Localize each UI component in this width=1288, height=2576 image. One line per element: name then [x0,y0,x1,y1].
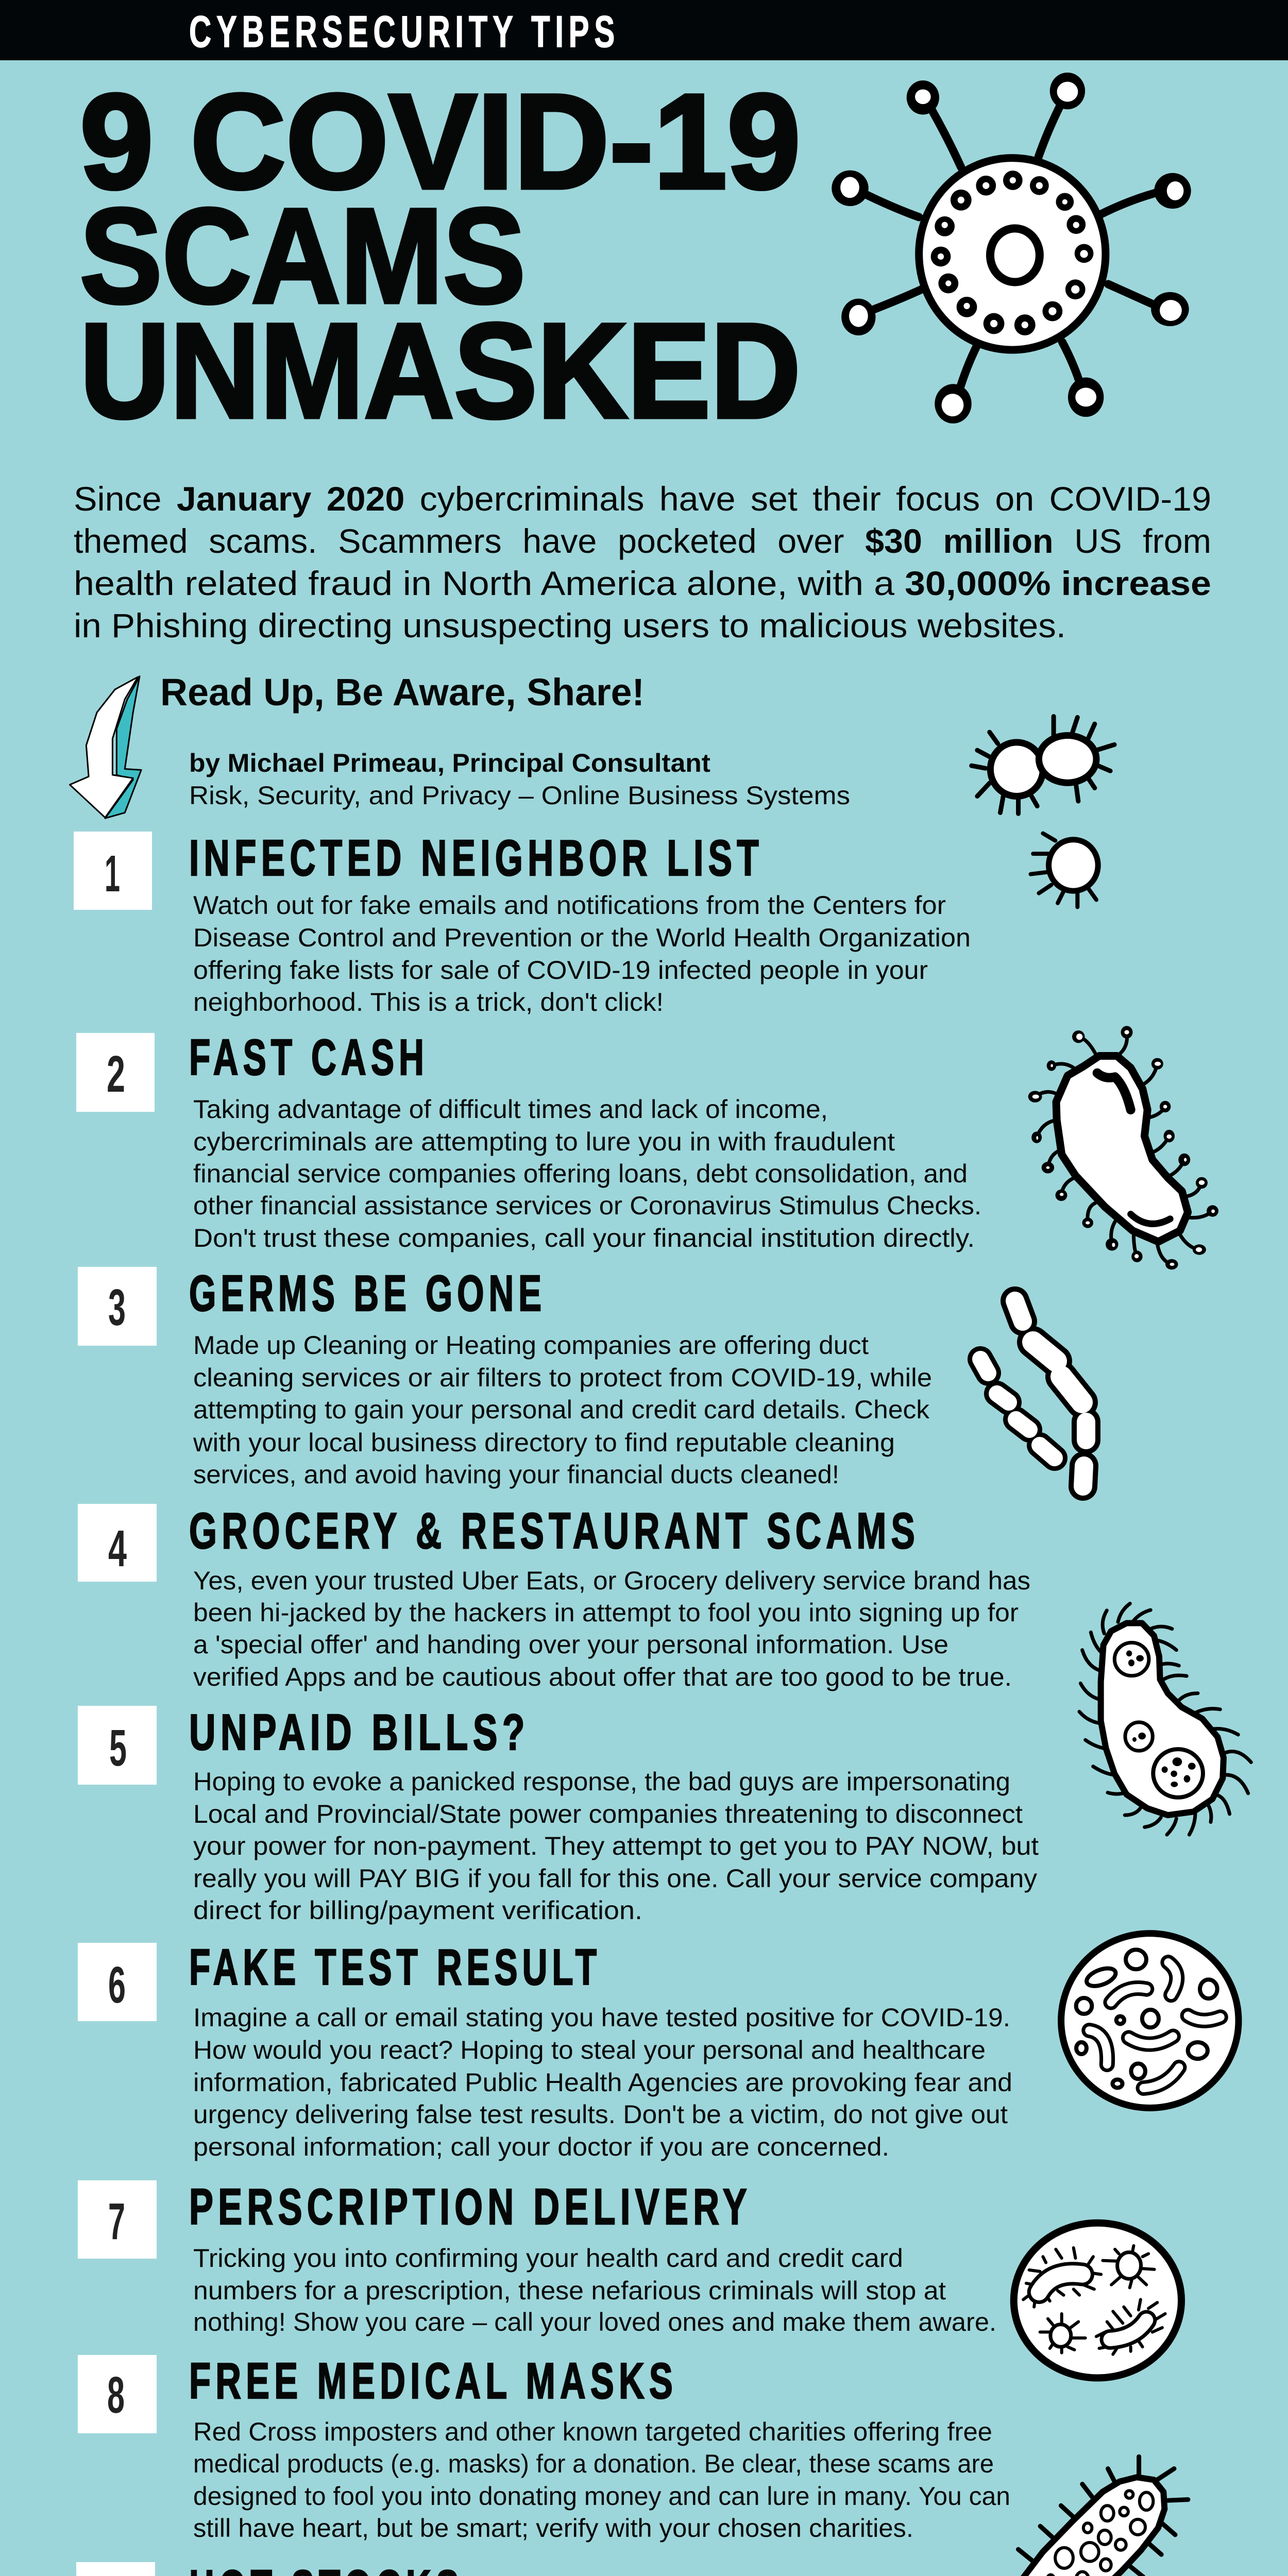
number badge 7: 7 [108,2193,125,2250]
body text 3 [193,1331,932,1489]
section 1: infected neighbor list [74,829,971,1016]
number badge 6 [78,1943,157,2021]
body text 8: medical products (e.g. masks) for a donation. Be clear, these scams are [193,2449,994,2478]
body text 2: cybercriminals are attempting to lure you in with fraudulent [193,1127,895,1156]
section 3: germs be gone [78,1265,932,1489]
icon: petri dish with cells [1061,1934,1239,2108]
body text 3: services, and avoid having your financial ducts cleaned! [193,1460,839,1489]
title [80,66,801,446]
top header band: CYBERSECURITY TIPS [189,7,620,57]
body text 8: Red Cross imposters and other known targeted charities offering free [193,2417,992,2446]
number badge 5 [78,1706,157,1785]
number badge 9 [76,2562,155,2576]
intro paragraph: health related fraud in North America alone, with a 30,000% increase [74,564,1211,602]
body text 7: numbers for a prescription, these nefarious criminals will stop at [193,2276,946,2305]
title: UNMASKED [80,295,801,446]
body text 1: Watch out for fake emails and notifications from the Centers for [193,891,946,920]
body text 2: Taking advantage of difficult times and lack of income, [193,1095,828,1124]
body text 3: Made up Cleaning or Heating companies are offering duct [193,1331,869,1360]
heading 4: GROCERY & RESTAURANT SCAMS [189,1502,920,1559]
body text 5: Hoping to evoke a panicked response, the bad guys are impersonating [193,1767,1010,1796]
byline [189,749,850,810]
section 6: fake test result [78,1939,1012,2161]
subheading: Read Up, Be Aware, Share! [160,671,645,714]
body text 6 [193,2003,1012,2161]
title: SCAMS [80,180,526,331]
body text 6: How would you react? Hoping to steal your personal and healthcare [193,2036,986,2064]
body text 5: Local and Provincial/State power companies threatening to disconnect [193,1800,1023,1828]
body text 6: Imagine a call or email stating you have tested positive for COVID-19. [193,2003,1010,2032]
heading 7: PERSCRIPTION DELIVERY [189,2178,752,2235]
body text 5: really you will PAY BIG if you fall for this one. Call your service company [193,1864,1037,1893]
body text 1: neighborhood. This is a trick, don't click! [193,988,664,1016]
body text 7: Tricking you into confirming your health card and credit card [193,2244,903,2273]
body text 2: financial service companies offering loans, debt consolidation, and [193,1159,968,1188]
heading 2: FAST CASH [189,1029,429,1086]
byline: Risk, Security, and Privacy – Online Business Systems [189,781,850,810]
number badge 1: 1 [105,845,120,903]
heading 8: FREE MEDICAL MASKS [189,2352,677,2409]
intro paragraph: themed scams. Scammers have pocketed over $30 million US from [74,522,1211,560]
icon: bacterium with tentacles [1028,1026,1218,1269]
section 7: prescription delivery [78,2178,996,2336]
number badge 3 [78,1267,157,1346]
body text 1: offering fake lists for sale of COVID-19 infected people in your [193,956,928,985]
body text 1: Disease Control and Prevention or the World Health Organization [193,923,971,952]
icon: two germ cells [972,716,1114,814]
body text 2: Don't trust these companies, call your financial institution directly. [193,1224,975,1252]
body text 4: Yes, even your trusted Uber Eats, or Grocery delivery service brand has [193,1566,1030,1595]
body text 3: cleaning services or air filters to protect from COVID-19, while [193,1363,932,1392]
body text 8 [193,2417,1010,2543]
body text 2: other financial assistance services or Coronavirus Stimulus Checks. [193,1191,981,1220]
body text 2 [193,1095,981,1252]
number badge 6: 6 [108,1956,126,2014]
body text 6: urgency delivering false test results. Don't be a victim, do not give out [193,2100,1008,2129]
body text 3: with your local business directory to find reputable cleaning [193,1428,895,1457]
heading 6: FAKE TEST RESULT [189,1939,601,1995]
number badge 4 [78,1504,157,1582]
body text 6: information, fabricated Public Health Agencies are provoking fear and [193,2068,1012,2097]
number badge 3: 3 [108,1279,126,1336]
body text 5: direct for billing/payment verification. [193,1896,642,1925]
body text 8: designed to fool you into donating money and can lure in many. You can [193,2482,1010,2511]
body text 6: personal information; call your doctor if you are concerned. [193,2132,889,2161]
body text 1 [193,891,971,1016]
body text 7: nothing! Show you care – call your loved ones and make them aware. [193,2308,996,2336]
top header band [0,0,1288,60]
body text 4: verified Apps and be cautious about offer that are too good to be true. [193,1663,1012,1691]
icon: hairy microbe [1079,1603,1251,1835]
heading 5: UNPAID BILLS? [189,1704,530,1760]
arrow pointing down [70,676,141,818]
intro paragraph: Since January 2020 cybercriminals have set their focus on COVID-19 [74,480,1211,518]
section 8: free medical masks [78,2352,1010,2543]
body text 5: your power for non-payment. They attempt to get you to PAY NOW, but [193,1832,1039,1860]
icon: rod bacterium [989,2456,1188,2576]
intro paragraph: in Phishing directing unsuspecting users to malicious websites. [74,606,1066,645]
icon: virus [832,73,1191,423]
body text 8: still have heart, but be smart; verify with your chosen charities. [193,2514,913,2543]
number badge 2: 2 [107,1045,125,1103]
number badge 1 [74,832,152,910]
number badge 8: 8 [107,2366,125,2424]
section 2: fast cash [76,1029,981,1252]
heading 3: GERMS BE GONE [189,1265,546,1321]
icon: single germ cell [1030,834,1098,907]
number badge 2 [76,1033,155,1112]
section 4: grocery and restaurant scams [78,1502,1030,1691]
number badge 5: 5 [109,1719,127,1777]
number badge 4: 4 [108,1520,127,1578]
body text 5 [193,1767,1039,1925]
body text 7 [193,2244,996,2336]
body text 4 [193,1566,1030,1691]
body text 3: attempting to gain your personal and credit card details. Check [193,1395,930,1424]
intro paragraph [74,480,1211,645]
heading 1: INFECTED NEIGHBOR LIST [189,829,764,886]
body text 4: a 'special offer' and handing over your personal information. Use [193,1630,948,1659]
section 5: unpaid bills [78,1704,1039,1925]
number badge 7 [78,2180,157,2259]
title: 9 COVID-19 [80,66,801,217]
byline: by Michael Primeau, Principal Consultant [189,749,710,777]
icon: bacteria chains [980,1301,1086,1486]
body text 4: been hi-jacked by the hackers in attempt to fool you into signing up for [193,1598,1019,1627]
icon: petri dish with germs [1014,2223,1181,2378]
section 9: hot stocks [76,2560,831,2576]
number badge 8 [78,2355,157,2433]
